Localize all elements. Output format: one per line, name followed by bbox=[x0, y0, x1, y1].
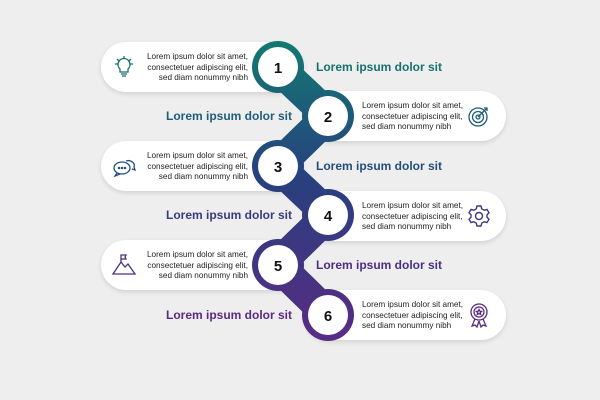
pill 4 bbox=[304, 191, 506, 241]
pill 4: Lorem ipsum dolor sit amet, consectetuer adipiscing elit, sed diam nonummy nibh bbox=[362, 201, 463, 231]
connector chain with numbered circles: 2 bbox=[324, 109, 332, 126]
title 1: Lorem ipsum dolor sit bbox=[316, 60, 442, 74]
pill 1: Lorem ipsum dolor sit amet, consectetuer adipiscing elit, sed diam nonummy nibh bbox=[147, 52, 248, 82]
pill 6: Lorem ipsum dolor sit amet, consectetuer adipiscing elit, sed diam nonummy nibh bbox=[362, 300, 463, 330]
pill 5: Lorem ipsum dolor sit amet, consectetuer adipiscing elit, sed diam nonummy nibh bbox=[147, 250, 248, 280]
icon: gear bbox=[468, 205, 490, 227]
icon: award bbox=[470, 303, 488, 328]
icon: mountain flag bbox=[112, 254, 136, 275]
title 4: Lorem ipsum dolor sit bbox=[166, 208, 292, 222]
icon: lightbulb bbox=[115, 56, 133, 77]
icon: chat bubbles bbox=[113, 160, 136, 178]
pill 2: Lorem ipsum dolor sit amet, consectetuer adipiscing elit, sed diam nonummy nibh bbox=[362, 101, 463, 131]
title 6: Lorem ipsum dolor sit bbox=[166, 308, 292, 322]
pill 2 bbox=[304, 91, 506, 141]
title 3: Lorem ipsum dolor sit bbox=[316, 159, 442, 173]
pill 5 bbox=[101, 240, 303, 290]
connector chain with numbered circles: 3 bbox=[274, 159, 282, 176]
pill 6 bbox=[304, 290, 506, 340]
connector chain with numbered circles: 1 bbox=[274, 60, 282, 77]
icon: target bbox=[468, 107, 488, 127]
pill 3: Lorem ipsum dolor sit amet, consectetuer adipiscing elit, sed diam nonummy nibh bbox=[147, 151, 248, 181]
connector chain with numbered circles: 4 bbox=[324, 208, 333, 225]
title 5: Lorem ipsum dolor sit bbox=[316, 258, 442, 272]
connector chain with numbered circles: 5 bbox=[274, 258, 282, 275]
title 2: Lorem ipsum dolor sit bbox=[166, 109, 292, 123]
pill 3 bbox=[101, 141, 303, 191]
connector chain with numbered circles: 6 bbox=[324, 308, 332, 325]
pill 1 bbox=[101, 42, 303, 92]
